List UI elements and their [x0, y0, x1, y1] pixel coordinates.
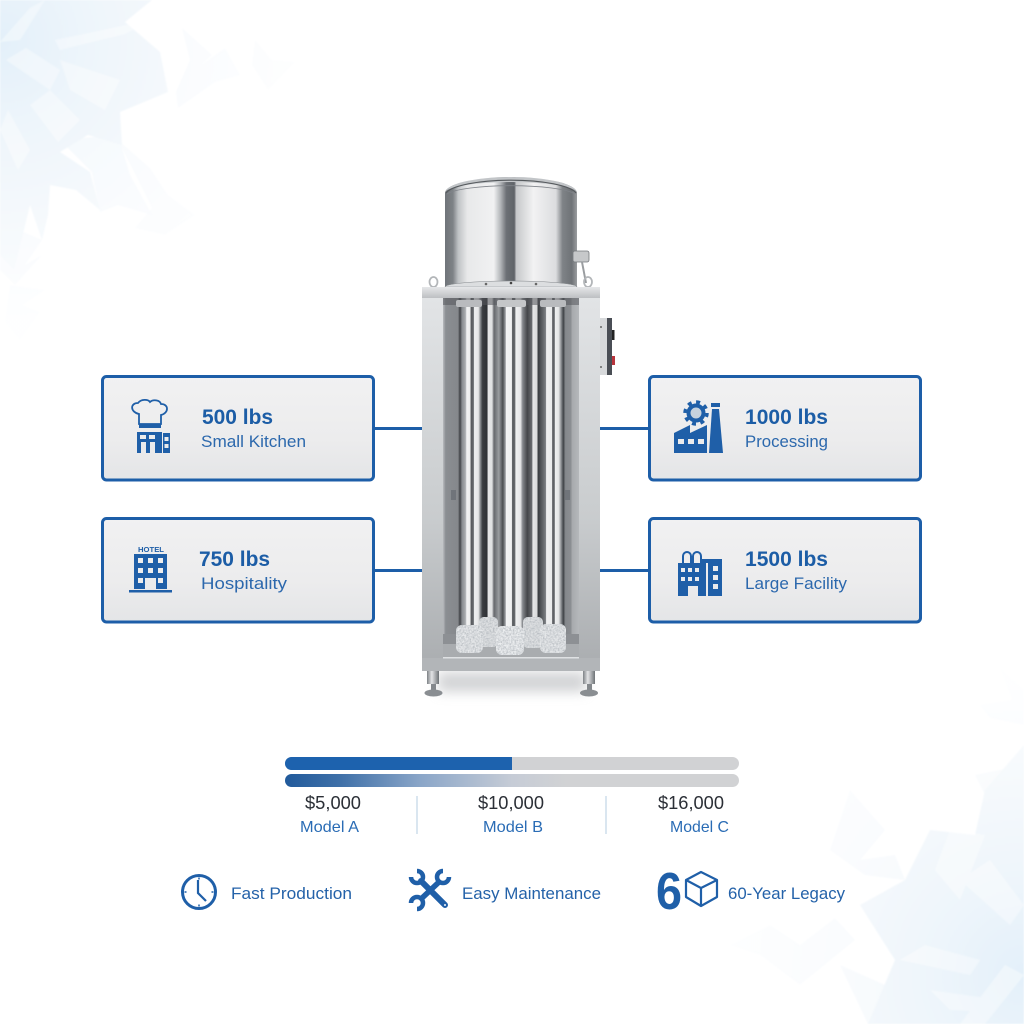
capacity value: 1500 lbs [745, 548, 828, 571]
icon: clock [182, 876, 216, 908]
label: Easy Maintenance [462, 884, 601, 903]
capacity label: Processing [745, 432, 828, 451]
feet [424, 671, 598, 696]
model B price: $10,000 [478, 793, 544, 813]
capacity value: 500 lbs [202, 406, 273, 429]
panel: 500 lbs small kitchen [102, 376, 374, 480]
capacity label: Small Kitchen [201, 432, 306, 451]
model B price [478, 793, 544, 836]
connector lines [374, 427, 648, 572]
icon: 60 with cube [656, 863, 717, 921]
model B price: Model B [483, 819, 543, 836]
label: 60-Year Legacy [728, 884, 845, 903]
model C price [658, 793, 729, 836]
icon: factory and gear [674, 402, 723, 453]
price bars [285, 757, 739, 787]
machine floor shadow [438, 672, 586, 692]
model A price: $5,000 [305, 793, 361, 813]
icon: hotel: HOTEL [138, 545, 164, 554]
frame opening with tubes [443, 298, 579, 658]
frame [422, 287, 600, 671]
ice cylinders [456, 617, 566, 655]
lifting rings [430, 277, 592, 287]
model C price: $16,000 [658, 793, 724, 813]
capacity label: Hospitality [201, 574, 288, 593]
feature: easy maintenance [411, 871, 601, 909]
drum [445, 177, 577, 287]
label: Fast Production [231, 884, 352, 903]
capacity value: 750 lbs [199, 548, 270, 571]
background snowflake: top left [0, 0, 295, 340]
panel: 750 lbs hospitality [102, 518, 374, 622]
feature: fast production [182, 876, 352, 908]
control box [600, 318, 615, 375]
price bar: gradient [285, 774, 739, 787]
drain valve [573, 251, 589, 283]
panel: 1500 lbs large facility [650, 518, 920, 622]
capacity label: Large Facility [745, 574, 847, 593]
machine: ice maker [422, 177, 615, 696]
icon: crossed wrenches [411, 871, 449, 909]
background snowflake: bottom right [730, 668, 1024, 1024]
panel: 1000 lbs processing [650, 376, 920, 480]
icon: chef hat and building [132, 400, 170, 453]
capacity value: 1000 lbs [745, 406, 828, 429]
icon: hotel [129, 545, 172, 592]
price bar: solid [285, 757, 739, 770]
feature: 60-year legacy [656, 863, 845, 921]
model A price: Model A [300, 819, 359, 836]
icon: large facility [678, 552, 722, 596]
model A price [300, 793, 361, 836]
icon: 60 with cube: 6 [656, 863, 682, 921]
model C price: Model C [670, 819, 729, 836]
price scale [300, 793, 729, 836]
